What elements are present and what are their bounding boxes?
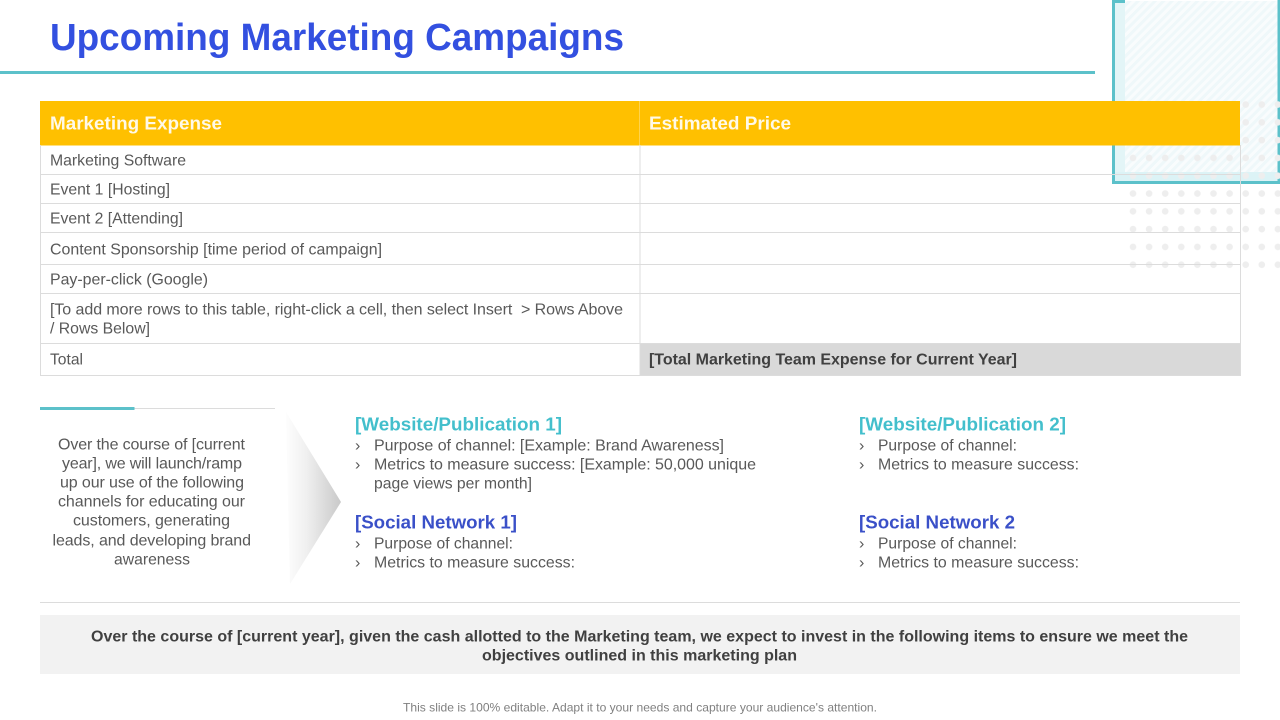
table row labels	[50, 152, 623, 368]
decorative dot grid	[1125, 96, 1280, 274]
intro text panel	[40, 407, 275, 568]
channel: social network 1: [Social Network 1]	[355, 512, 517, 532]
channel: social network 2: Purpose of channel:	[878, 536, 1017, 552]
footer note: This slide is 100% editable. Adapt it to your needs and capture your audience's attention.	[403, 700, 877, 714]
channel: social network 1: ›	[355, 554, 360, 572]
intro paragraph: Over the course of [current	[58, 436, 246, 454]
table header row: Estimated Price	[649, 114, 791, 134]
channel: social network 1: ›	[355, 536, 360, 552]
table row labels: Total	[50, 352, 83, 368]
channel: social network 1: Purpose of channel:	[374, 536, 513, 552]
intro paragraph: awareness	[114, 552, 190, 568]
intro paragraph: up our use of the following	[60, 474, 244, 492]
intro paragraph: year], we will launch/ramp	[62, 456, 242, 472]
channel: website/publication 1	[355, 414, 756, 492]
channel: website/publication 2: [Website/Publication 2]	[859, 414, 1066, 434]
table row labels: Pay-per-click (Google)	[50, 272, 208, 288]
table row labels: / Rows Below]	[50, 320, 150, 338]
channel: website/publication 1: Metrics to measure success: [Example: 50,000 unique	[374, 456, 756, 474]
intro paragraph: leads, and developing brand	[52, 532, 251, 550]
intro paragraph	[52, 436, 251, 568]
channel: social network 2: ›	[859, 536, 864, 552]
channel: website/publication 1: ›	[355, 438, 360, 454]
summary callout: Over the course of [current year], given the cash allotted to the Marketing team, we expect to invest in the following items to ensure we meet the	[91, 628, 1188, 646]
channel: website/publication 2: Metrics to measure success:	[878, 456, 1079, 474]
arrow	[286, 412, 341, 584]
total expense text: [Total Marketing Team Expense for Current Year]	[649, 352, 1017, 368]
table row labels: Event 1 [Hosting]	[50, 182, 170, 198]
channel: website/publication 1: Purpose of channel: [Example: Brand Awareness]	[374, 438, 724, 454]
channel: website/publication 2: ›	[859, 456, 864, 474]
table header row: Marketing Expense	[50, 114, 222, 134]
channel: website/publication 2	[859, 414, 1079, 474]
table row labels: Marketing Software	[50, 152, 186, 170]
channel: social network 1	[355, 512, 575, 572]
summary callout: objectives outlined in this marketing plan	[482, 648, 797, 664]
title underline	[0, 71, 1095, 74]
table row labels: Content Sponsorship [time period of campaign]	[50, 242, 382, 258]
channel: social network 2: ›	[859, 554, 864, 572]
channel: website/publication 2: Purpose of channel:	[878, 438, 1017, 454]
total price cell	[640, 344, 1240, 375]
channel: social network 1: Metrics to measure success:	[374, 554, 575, 572]
expense table	[40, 101, 1241, 376]
channel: website/publication 1: ›	[355, 456, 360, 474]
intro paragraph: customers, generating	[73, 512, 230, 530]
intro paragraph: channels for educating our	[58, 494, 246, 510]
channel: website/publication 2: ›	[859, 438, 864, 454]
channel: website/publication 1: [Website/Publication 1]	[355, 414, 562, 434]
table grid lines	[40, 145, 1241, 376]
title: Upcoming Marketing Campaigns	[50, 17, 624, 59]
decorative frame: hatched teal rectangle	[1112, 0, 1279, 182]
table header row	[40, 101, 1240, 146]
channel: social network 2: Metrics to measure success:	[878, 554, 1079, 572]
summary callout	[40, 615, 1240, 674]
table row labels: [To add more rows to this table, right-click a cell, then select Insert > Rows Above	[50, 302, 623, 318]
channel: social network 2	[859, 512, 1079, 572]
channel: social network 2: [Social Network 2	[859, 512, 1015, 532]
channel: website/publication 1: page views per month]	[374, 476, 532, 492]
table row labels: Event 2 [Attending]	[50, 210, 183, 228]
